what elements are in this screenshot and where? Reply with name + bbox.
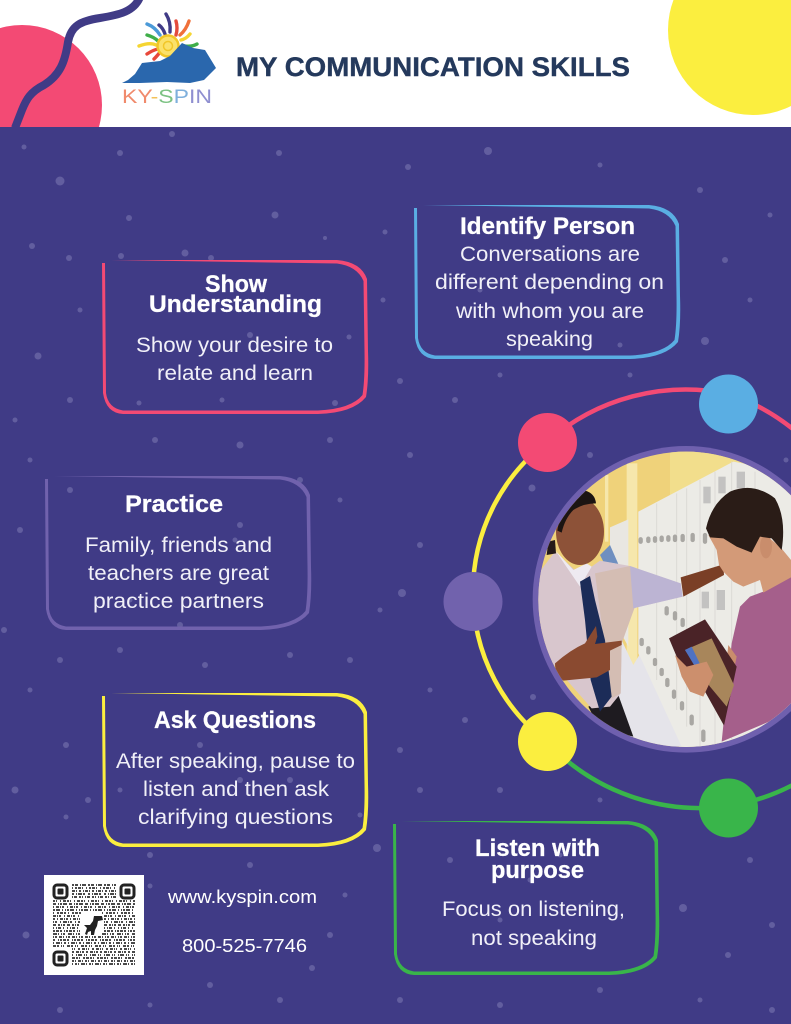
body text: listen and then ask (143, 777, 329, 801)
body text: different depending on (435, 270, 664, 294)
background person (600, 545, 618, 564)
logo sun rays (139, 14, 197, 59)
body text: teachers are great (88, 561, 269, 585)
body text: with whom you are (455, 299, 644, 323)
heading (475, 835, 600, 884)
teacher head (556, 498, 604, 565)
teacher hand (555, 626, 622, 681)
body text: speaking (506, 327, 593, 351)
logo Kentucky map (122, 43, 216, 83)
body text: Focus on listening, (442, 897, 625, 921)
body text: practice partners (93, 589, 264, 613)
wave line (15, 0, 140, 128)
heading: Listen with (475, 835, 600, 862)
body text: not speaking (471, 926, 597, 950)
panel: Practice (45, 476, 311, 630)
heading: Ask Questions (154, 707, 316, 734)
teacher trousers (588, 695, 633, 737)
body text: relate and learn (157, 361, 313, 385)
orbit arc: pink (547, 390, 791, 442)
heading: Show (205, 271, 267, 298)
node: yellow (518, 712, 577, 771)
body text (442, 897, 625, 950)
body text: Family, friends and (85, 533, 272, 557)
logo sun (158, 36, 178, 56)
QR dinosaur icon (84, 916, 103, 935)
panel: Identify Person (414, 205, 680, 359)
panel: Listen with purpose (393, 821, 659, 975)
student arm (728, 645, 737, 664)
heading: purpose (491, 857, 584, 884)
body text (85, 533, 272, 613)
heading: Identify Person (460, 213, 635, 240)
panel: Show Understanding (102, 260, 368, 414)
student shirt (722, 577, 791, 742)
logo wordmark: KY -SPIN (122, 87, 212, 108)
left lockers (610, 519, 628, 647)
heading: Understanding (149, 291, 322, 318)
pink circle (0, 25, 102, 127)
website: www.kyspin.com (167, 886, 317, 907)
body text (136, 333, 333, 385)
orbit arc: yellow (473, 442, 547, 742)
phone number: 800-525-7746 (182, 935, 307, 956)
logo: KY-SPIN (122, 14, 216, 108)
student face and neck (708, 533, 791, 593)
QR finder patterns (54, 885, 134, 965)
lockers (638, 462, 791, 748)
body text: Show your desire to (136, 333, 333, 357)
student book (669, 619, 737, 726)
body text: Conversations are (460, 242, 640, 266)
orbit ring with nodes (444, 374, 791, 838)
node: purple (444, 572, 502, 631)
teacher collar (555, 550, 592, 587)
body text (116, 749, 355, 829)
QR code (44, 875, 144, 975)
panel: Ask Questions (102, 693, 368, 847)
body text: After speaking, pause to (116, 749, 355, 773)
teacher arm (681, 564, 724, 597)
teacher tie (580, 576, 612, 712)
teacher shirt (533, 552, 683, 708)
heading (149, 271, 322, 318)
yellow circle (668, 0, 791, 115)
body text (435, 242, 664, 351)
body text: clarifying questions (138, 805, 333, 829)
header band (0, 0, 791, 127)
node: green (699, 778, 758, 838)
student hair (706, 488, 783, 553)
title: MY COMMUNICATION SKILLS (236, 52, 630, 82)
floor (617, 637, 682, 747)
circular photo: teacher and student (520, 440, 791, 757)
node: blue (699, 374, 758, 434)
heading: Practice (125, 491, 223, 518)
orbit arc: green (547, 742, 791, 808)
student hand (675, 655, 713, 697)
node: pink (518, 413, 577, 472)
